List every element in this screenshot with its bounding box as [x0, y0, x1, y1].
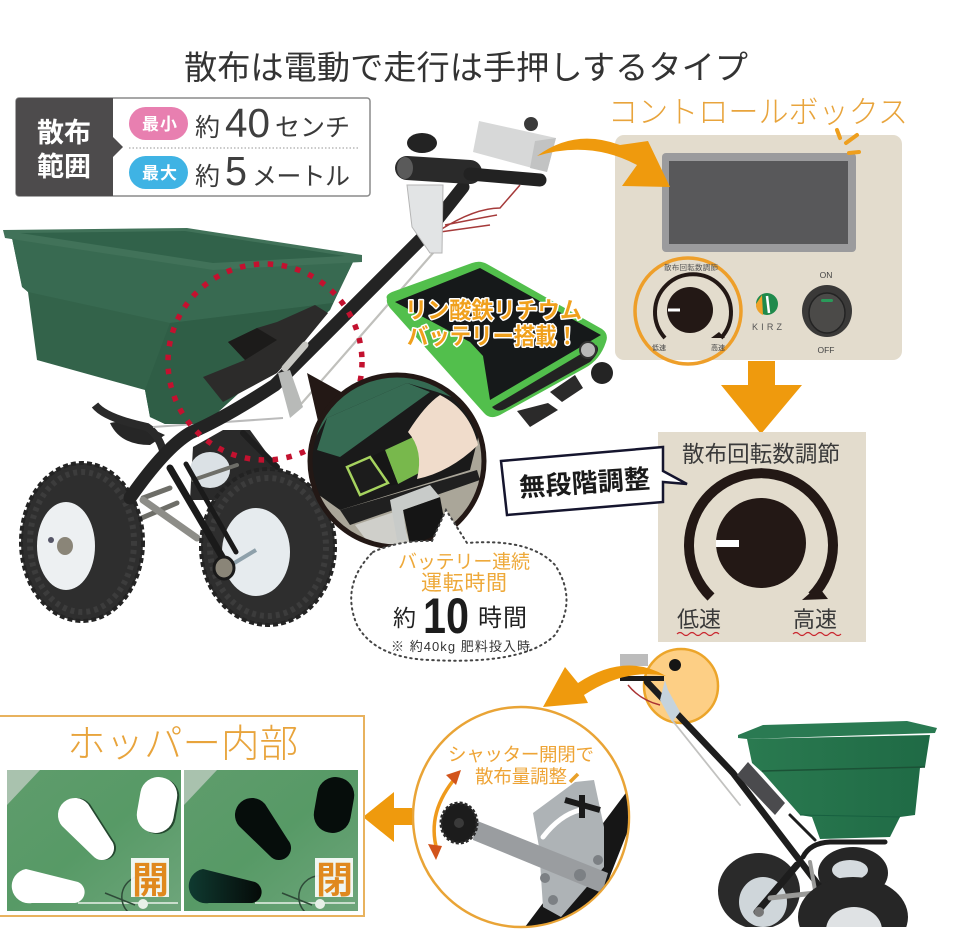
small front wheel: [798, 877, 908, 929]
battery runtime speech bubble: 約: [393, 605, 416, 631]
battery runtime speech bubble: バッテリー連続: [398, 551, 530, 573]
hopper: [3, 228, 362, 424]
battery runtime speech bubble: ※ 約40kg 肥料投入時: [391, 639, 530, 654]
on/off switch: OFF: [818, 345, 834, 355]
arrow to hopper interior: [363, 792, 412, 842]
maximum range: メートル: [252, 163, 350, 191]
battery photo: [387, 262, 613, 427]
maximum range: 5: [225, 148, 247, 194]
shutter lever mechanism: [441, 780, 640, 927]
battery runtime speech bubble: 10: [423, 588, 469, 644]
inset: battery slot with hand: [308, 372, 486, 548]
stepless adjustment callout: [501, 447, 687, 515]
hopper spinner and frame loop: [95, 405, 283, 458]
on/off switch: [802, 270, 852, 355]
maximum range: [129, 148, 350, 194]
small spreader photo: [620, 649, 937, 929]
range heading: [37, 118, 91, 182]
photo: shutter closed: [184, 770, 358, 912]
handle tube: [130, 187, 463, 498]
panel: hopper interior: [0, 716, 364, 916]
on/off switch: ON: [820, 270, 832, 280]
speed labels: 低速: [677, 607, 721, 632]
KIRZ logo: KIRZ: [752, 322, 782, 332]
red dotted highlight circle: [168, 264, 362, 460]
small back wheel: [818, 847, 888, 884]
small handle and controller: [620, 654, 681, 722]
shutter caption: [448, 744, 594, 787]
frame legs and cross tubes: [137, 433, 277, 538]
small plate: [737, 762, 785, 815]
shutter close-up circle: [413, 707, 640, 927]
hopper-mounted battery box: [203, 305, 328, 402]
speed dial: 低速: [652, 343, 666, 352]
stepless adjustment callout: 無段階調整: [518, 463, 651, 503]
double arrow: [428, 770, 461, 860]
battery caption: リン酸鉄リチウム: [405, 297, 582, 323]
speed labels: [677, 607, 837, 632]
speed labels: 高速: [793, 607, 837, 632]
label: closed: 閉: [316, 860, 353, 901]
minimum range: センチ: [275, 114, 350, 142]
KIRZ logo: [752, 293, 782, 332]
speed dial: 散布回転数調節: [664, 262, 718, 272]
range heading: 範囲: [37, 152, 91, 182]
maximum range: 約: [195, 163, 220, 191]
back wheel: [190, 430, 290, 500]
minimum range: [129, 100, 350, 146]
panel: hopper interior: ホッパー内部: [67, 723, 298, 766]
panel: dial detail: [658, 432, 866, 642]
handle grip and bracket: [397, 133, 540, 253]
left wheel: [21, 463, 143, 621]
curved arrow to shutter: [543, 666, 666, 707]
panel: spreading range: [16, 98, 370, 196]
battery runtime speech bubble: [351, 510, 566, 661]
battery runtime speech bubble: 時間: [478, 605, 527, 632]
pointer to inset: [307, 373, 343, 430]
display screen: [662, 153, 856, 252]
small hopper: [738, 721, 937, 839]
arrow to control box: [537, 139, 670, 187]
panel: control box: [615, 135, 902, 364]
right wheel: [201, 469, 335, 625]
minimum range: 40: [225, 100, 270, 146]
speed dial: 高速: [711, 343, 725, 352]
control box title: コントロールボックス: [608, 95, 908, 130]
legs over right wheel: [170, 464, 236, 579]
shutter caption: シャッター開閉で: [448, 744, 594, 765]
shutter caption: 散布量調整: [475, 766, 567, 787]
speed dial: [635, 258, 741, 364]
arrow down to dial detail: [721, 361, 802, 434]
title: 散布は電動で走行は手押しするタイプ: [184, 49, 748, 86]
photo: shutter open: [7, 770, 182, 912]
highlight circle behind handle: [644, 649, 718, 723]
small frame: [647, 682, 885, 912]
battery runtime speech bubble: 運転時間: [421, 572, 507, 595]
battery caption: [405, 297, 582, 349]
range heading: 散布: [37, 118, 91, 148]
battery caption: バッテリー搭載！: [407, 323, 578, 349]
controller box on handle: [473, 117, 556, 172]
sparkle marks: [837, 130, 859, 153]
minimum range: 約: [195, 114, 220, 142]
dial arc and knob: [689, 473, 833, 600]
wires: [440, 185, 520, 232]
panel: dial detail: 散布回転数調節: [682, 442, 840, 467]
label: open: 開: [132, 860, 169, 901]
photo: main spreader: [3, 117, 556, 625]
maximum range: 最大: [142, 164, 177, 183]
small rear wheel: [718, 853, 800, 929]
minimum range: 最小: [142, 115, 177, 134]
